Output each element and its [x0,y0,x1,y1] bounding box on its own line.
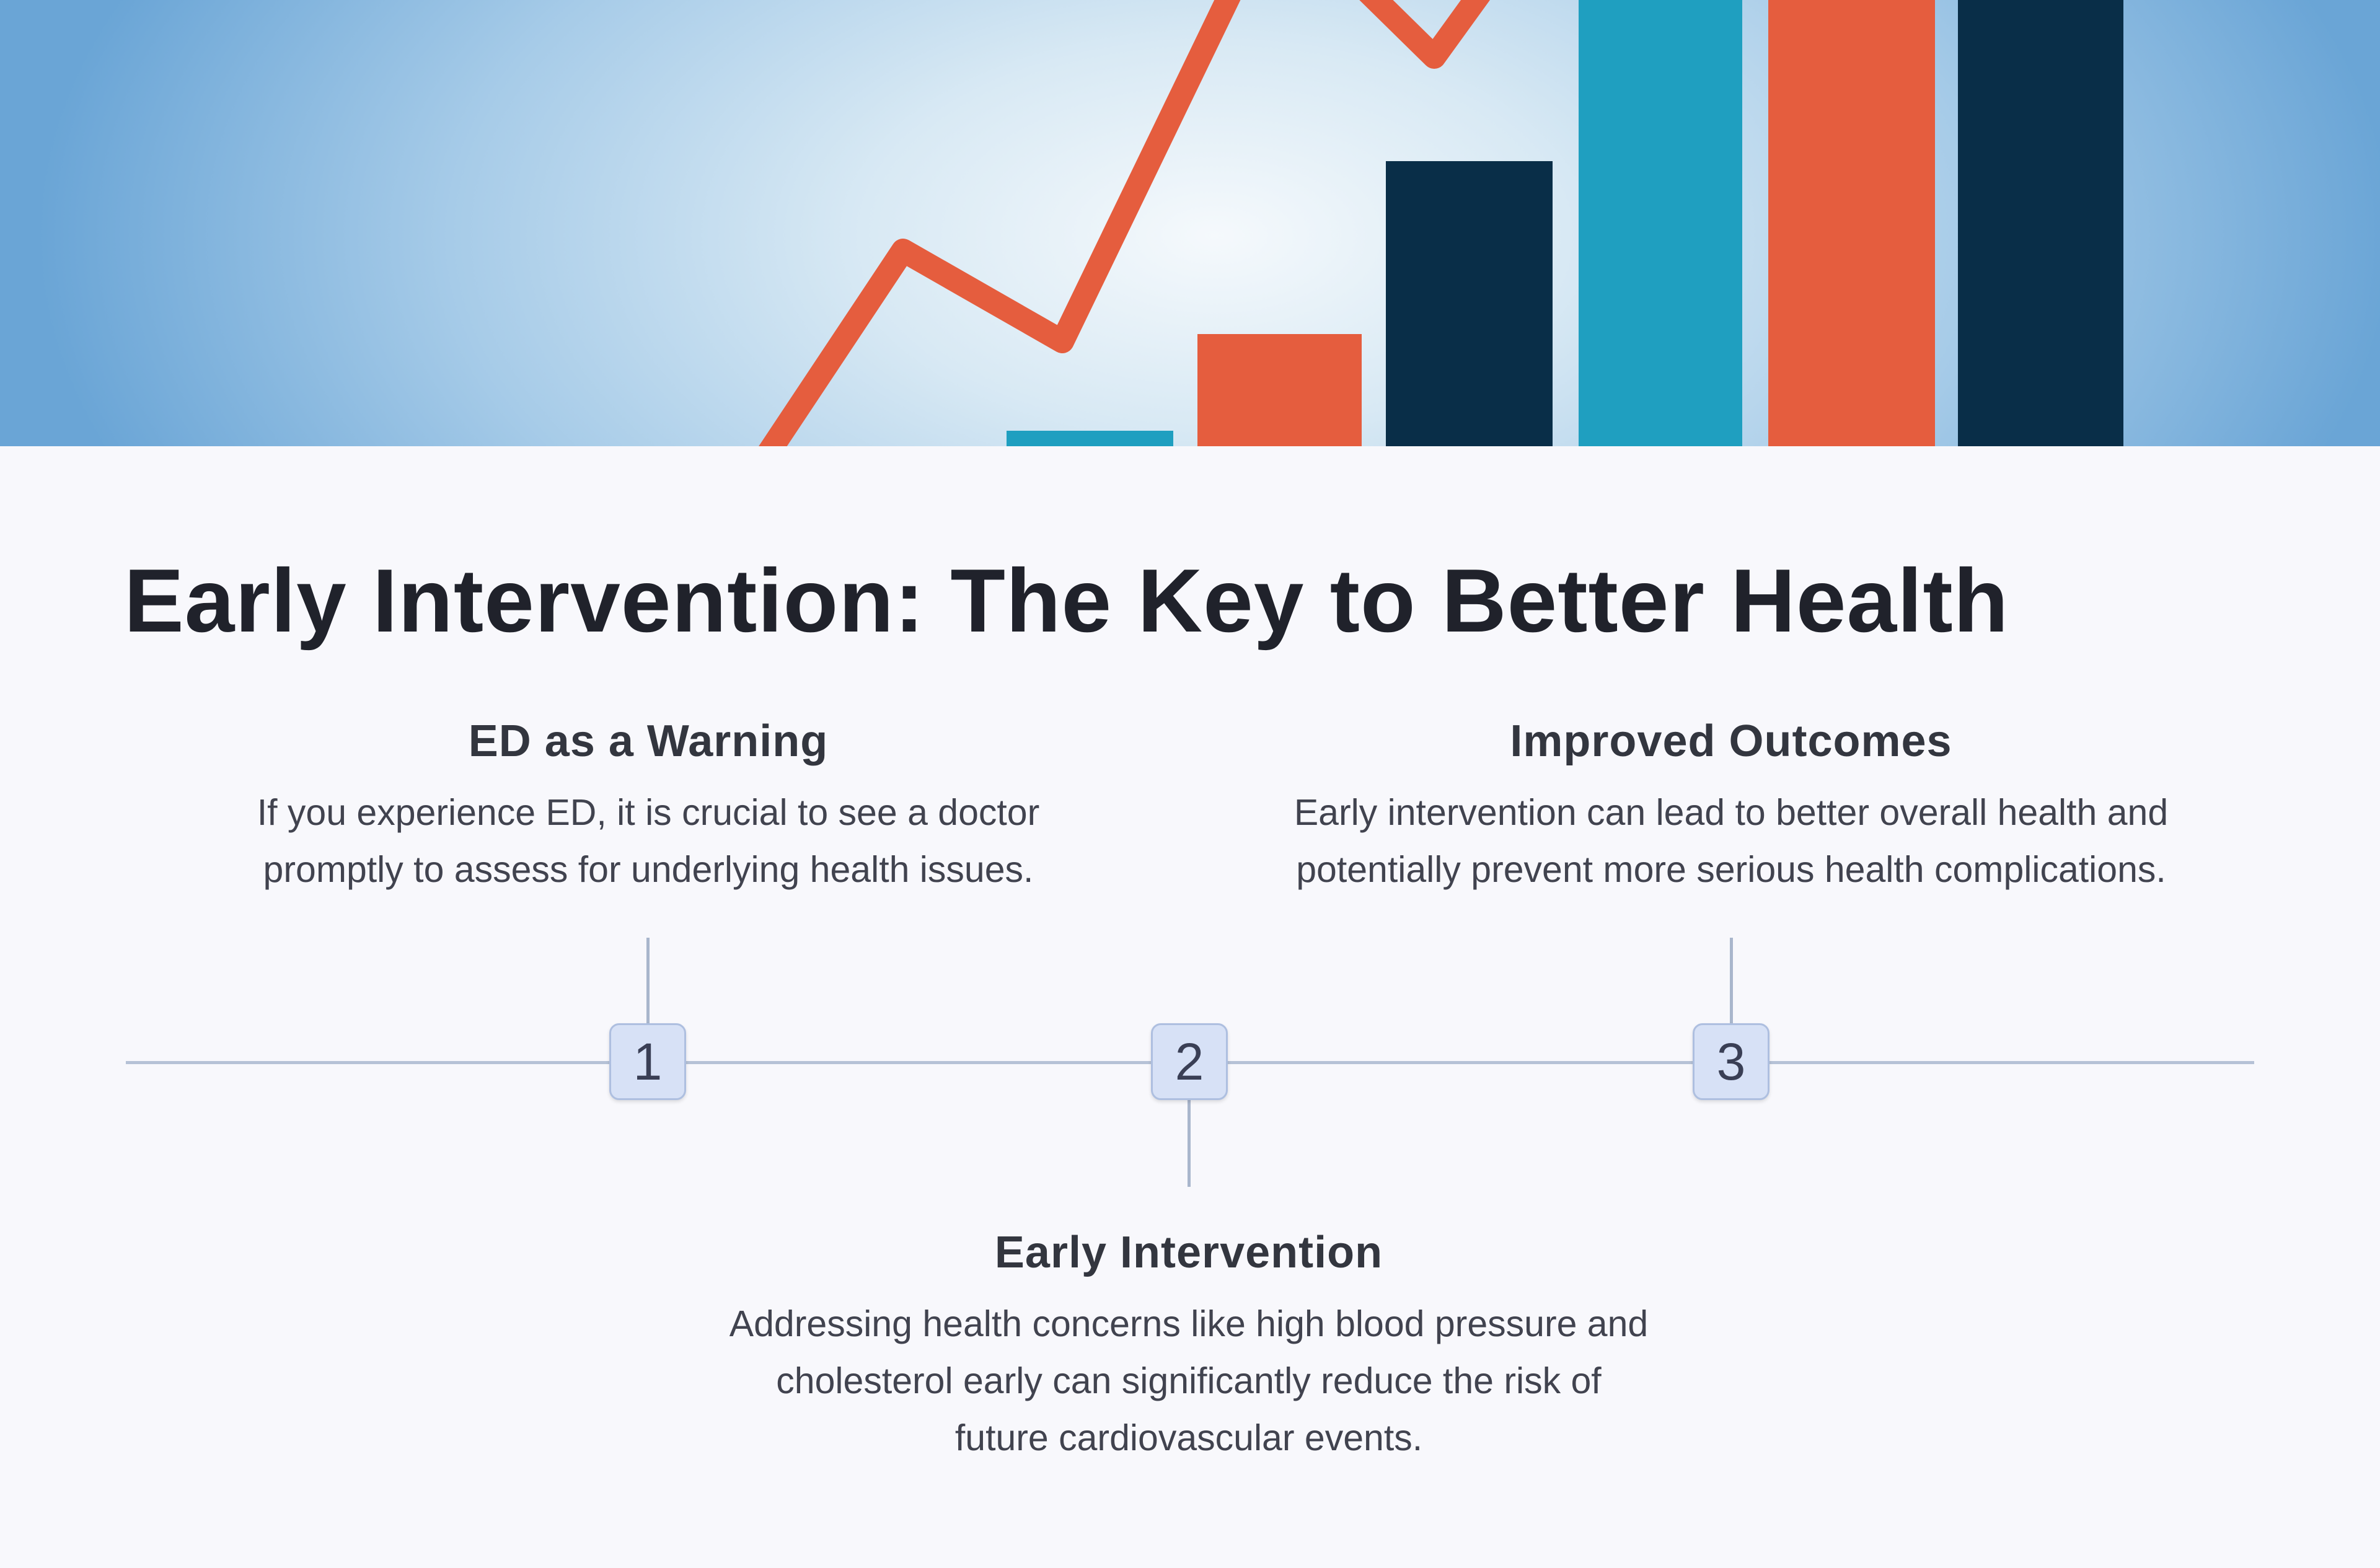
marker 3: 3 [1717,1033,1745,1091]
connector 1 [646,938,650,1024]
header image: chart [0,0,2380,446]
step 2 text [729,1228,1648,1458]
body 1 [257,792,1039,890]
body 3 [1294,792,2168,890]
body 1: promptly to assess for underlying health issues. [263,849,1033,890]
heading 2: Early Intervention [995,1228,1383,1277]
body 2: future cardiovascular events. [955,1417,1422,1458]
title: Early Intervention: The Key to Better Health [124,550,2009,651]
marker 1: 1 [633,1033,662,1091]
body 2 [729,1303,1648,1458]
body 2: Addressing health concerns like high blood pressure and [729,1303,1648,1344]
step 3 text [1294,716,2168,890]
connector 2 [1188,1099,1191,1187]
trend line [767,0,1233,456]
step 1 text [257,716,1039,890]
heading 3: Improved Outcomes [1510,716,1952,766]
body 2: cholesterol early can significantly reduce the risk of [776,1360,1602,1401]
body 1: If you experience ED, it is crucial to see a doctor [257,792,1039,833]
timeline line [126,1061,2254,1064]
marker 1 [609,1023,686,1100]
body 3: Early intervention can lead to better overall health and [1294,792,2168,833]
heading 1: ED as a Warning [469,716,828,766]
marker 3 [1693,1023,1770,1100]
marker 2: 2 [1175,1033,1204,1091]
body 3: potentially prevent more serious health complications. [1296,849,2166,890]
marker 2 [1151,1023,1228,1100]
bars [1007,0,2123,446]
connector 3 [1730,938,1733,1024]
